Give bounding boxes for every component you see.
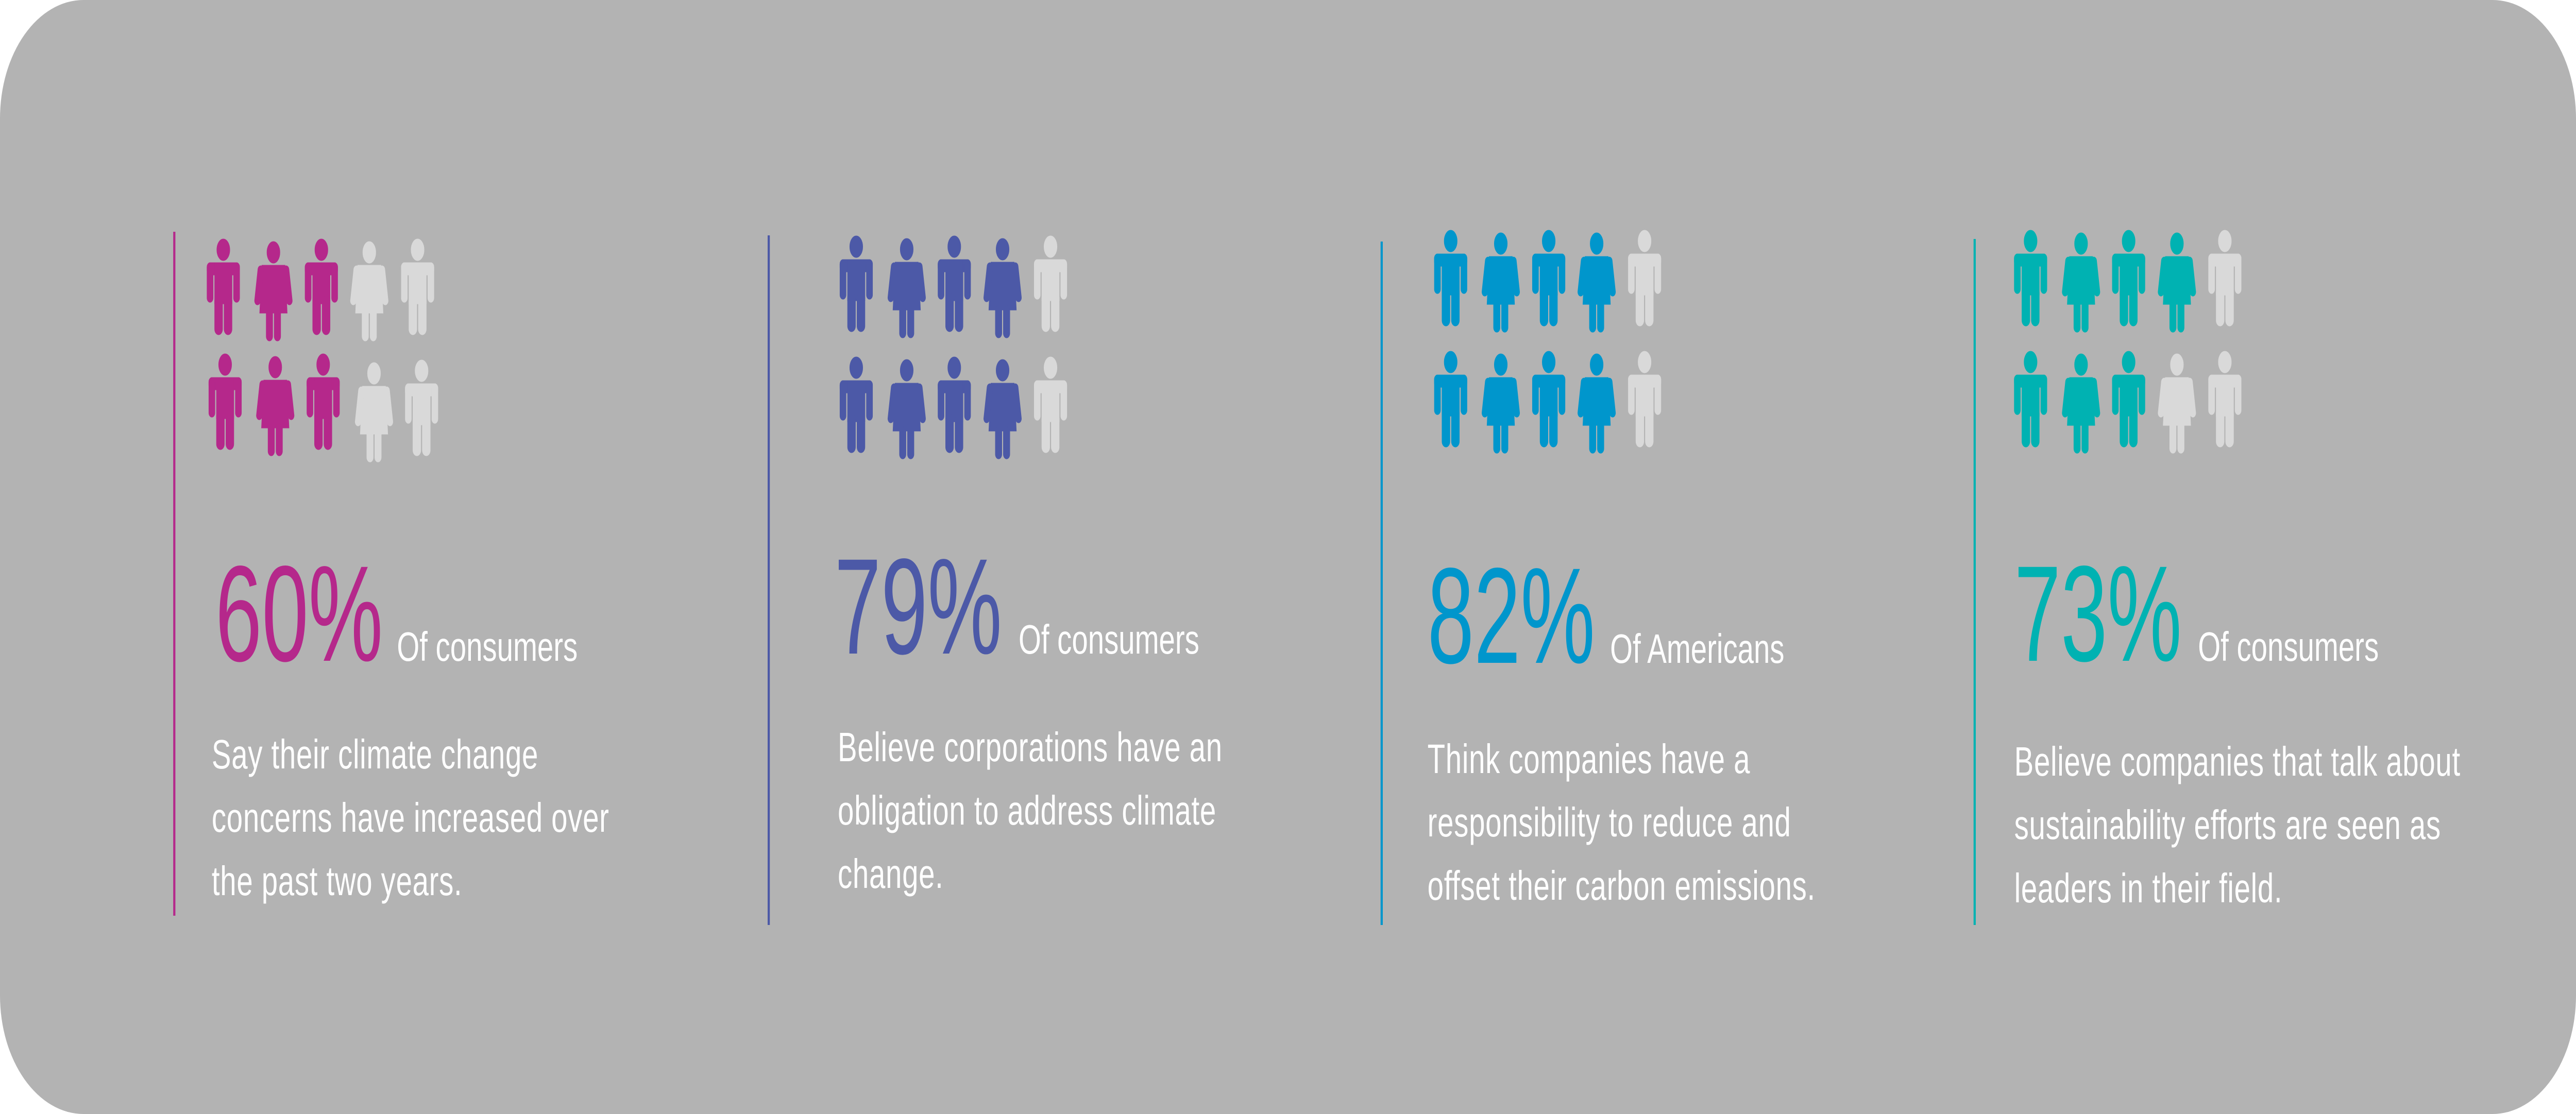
icon grid: panel 3 [1434,230,1661,453]
body text: panel 3: responsibility to reduce and [1428,799,1791,845]
big number: 79%: 79% [835,530,1002,683]
divider line: panel 4 [1974,239,1976,925]
body text: panel 1: Say their climate change [212,731,538,777]
subhead: Of Americans: Of Americans [1610,625,1785,672]
body text: panel 3: Think companies have a [1428,735,1750,782]
panel 3: 82% of Americans [1381,230,1816,925]
subhead: Of consumers (2): Of consumers [1019,616,1199,662]
subhead: Of consumers: Of consumers [397,623,578,670]
body text: panel 3: offset their carbon emissions. [1428,862,1816,909]
icon grid: panel 1 [207,239,438,462]
divider line: panel 2 [768,235,770,925]
subhead: Of consumers (4): Of consumers [2198,623,2379,670]
body text: panel 1: concerns have increased over [212,794,609,841]
body text: panel 4: sustainability efforts are seen as [2014,801,2441,848]
icon grid: panel 4 [2014,230,2241,453]
divider line: panel 1 [173,232,175,916]
body text: panel 2: obligation to address climate [838,787,1216,833]
body text: panel 4: Believe companies that talk about [2014,738,2461,784]
panel 2: 79% of consumers [768,235,1223,925]
divider line: panel 3 [1381,242,1383,925]
body text: panel 2: Believe corporations have an [838,724,1223,770]
big number: 73%: 73% [2014,537,2182,690]
big number: 82%: 82% [1428,539,1595,692]
body text: panel 1: the past two years. [212,858,462,904]
panel 4: 73% of consumers [1974,230,2461,925]
big number: 60%: 60% [215,537,383,690]
panel 1: 60% of consumers [173,232,609,916]
body text: panel 2: change. [838,850,944,897]
icon grid: panel 2 [840,236,1067,459]
body text: panel 4: leaders in their field. [2014,865,2282,911]
